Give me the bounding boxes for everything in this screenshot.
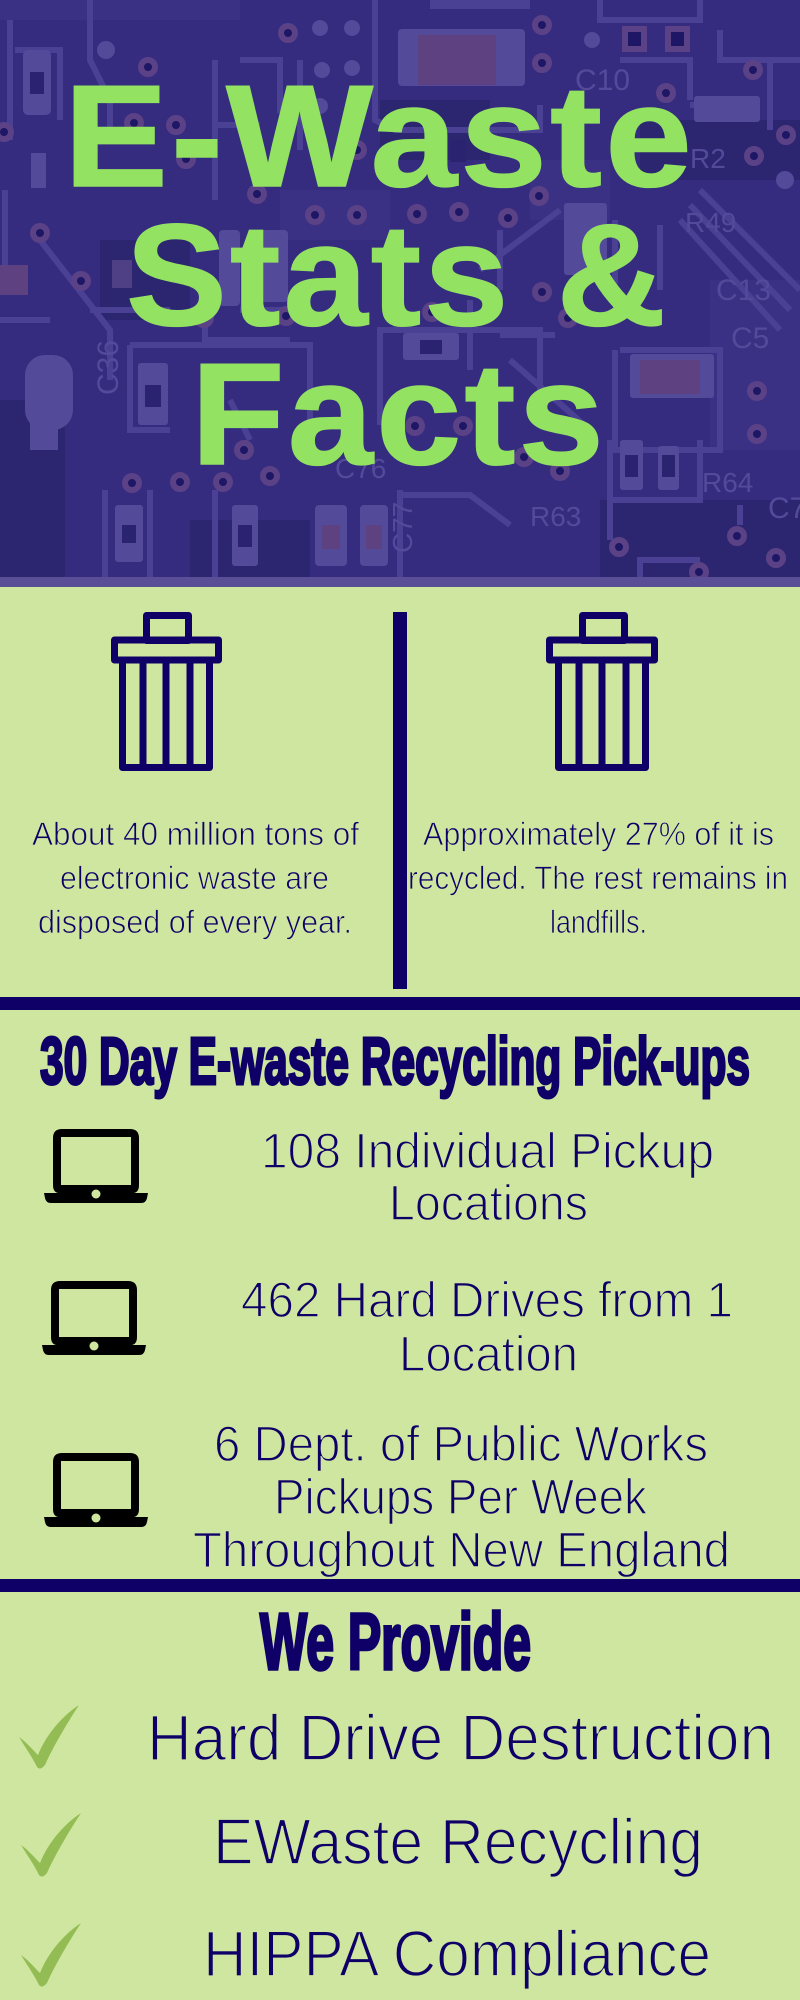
text: 27 percent recycled	[408, 816, 788, 940]
icon: laptop 2	[42, 1281, 146, 1355]
text: 6 DPW pickups	[193, 1416, 730, 1578]
section divider	[0, 1579, 800, 1592]
text: 462 hard drives: Location	[399, 1326, 578, 1382]
text: 6 DPW pickups: Throughout New England	[193, 1522, 730, 1578]
text: 108 pickups: 108 Individual Pickup	[261, 1123, 714, 1179]
text: hippa compliance: HIPPA Compliance	[203, 1917, 711, 1990]
title: Facts	[191, 333, 607, 495]
circuit board photo texture: C5	[731, 322, 769, 355]
text: 462 hard drives: 462 Hard Drives from 1	[241, 1272, 733, 1328]
title: E-Waste	[64, 55, 695, 217]
icon: check 2	[21, 1813, 81, 1877]
text: 40 million tons: electronic waste are	[60, 860, 329, 896]
circuit board photo texture: C36	[92, 340, 125, 395]
icon: laptop 1	[44, 1129, 148, 1203]
text: 40 million tons	[32, 816, 359, 940]
text: ewaste recycling: EWaste Recycling	[213, 1805, 703, 1878]
circuit board photo texture: R64	[702, 467, 753, 498]
title: Stats &	[126, 194, 669, 356]
text: 27 percent recycled: landfills.	[550, 904, 647, 940]
text: 462 hard drives	[241, 1272, 733, 1382]
circuit board photo texture: C13	[716, 274, 771, 307]
text: 6 DPW pickups: Pickups Per Week	[274, 1469, 648, 1525]
panel: statistics	[32, 612, 788, 989]
circuit board photo texture: R2	[690, 143, 726, 174]
panel: 30 day pick-ups	[40, 1024, 750, 1578]
text: 40 million tons: disposed of every year.	[38, 904, 352, 940]
section divider	[0, 997, 800, 1010]
panel: hero header with circuit board background	[0, 0, 800, 579]
text: 108 pickups	[261, 1123, 714, 1231]
circuit board photo texture: C10	[575, 64, 630, 97]
text: 108 pickups: Locations	[389, 1175, 588, 1231]
circuit board photo texture: R63	[530, 501, 581, 532]
icon: trash can right	[550, 616, 654, 768]
text: hard drive destruction: Hard Drive Destruction	[147, 1701, 774, 1774]
title	[64, 55, 695, 495]
text: 40 million tons: About 40 million tons of	[32, 816, 359, 852]
circuit board photo texture: R49	[685, 207, 736, 238]
icon: trash can left	[114, 616, 218, 768]
text: 27 percent recycled: Approximately 27% of it is	[423, 816, 774, 852]
vertical divider	[393, 612, 407, 989]
icon: check 1	[19, 1705, 79, 1769]
circuit board photo texture	[0, 0, 800, 579]
icon: check 3	[21, 1923, 81, 1987]
circuit board photo texture: C77	[387, 502, 418, 553]
circuit board photo texture: C76	[335, 453, 386, 484]
heading: we provide: We Provide	[260, 1597, 531, 1686]
icon: laptop 3	[44, 1453, 148, 1527]
panel: we provide	[19, 1597, 774, 1990]
text: 6 DPW pickups: 6 Dept. of Public Works	[214, 1416, 708, 1472]
hero divider strip	[0, 577, 800, 587]
